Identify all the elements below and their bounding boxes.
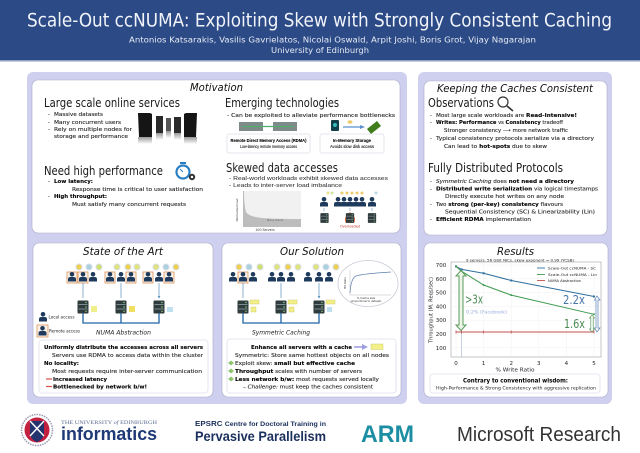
- text box: Increased latency: [53, 377, 108, 383]
- need high performance: -: [48, 179, 50, 185]
- text box: Symmetric: Store same hottest objects on all nodes: [235, 353, 389, 359]
- chart: magnified cache size curve: (proportional to dataset): [351, 299, 381, 303]
- text box: – Challenge: must keep the caches consistent: [243, 384, 373, 390]
- observations: [428, 96, 594, 150]
- arrow: 1.6x gain: [590, 315, 594, 332]
- large scale online services: -: [48, 112, 50, 118]
- diagram: symmetric caching: [229, 264, 339, 323]
- observations: -: [430, 136, 432, 142]
- large scale online services: -: [48, 127, 50, 133]
- logo: university of edinburgh informatics: informatics: [61, 423, 157, 444]
- emerging technologies: - Can be exploited to alleviate performance bottlenecks: [227, 113, 395, 119]
- large scale online services: Massive datasets: [54, 112, 103, 118]
- x axis ticks: 4: [565, 361, 569, 367]
- need high performance: Must satisfy many concurrent requests: [72, 202, 186, 208]
- fully distributed protocols: Efficient RDMA implementation: [436, 217, 531, 223]
- series: NUMA abstraction: [456, 330, 594, 334]
- need high performance: Response time is critical to user satisfaction: [72, 187, 203, 193]
- logo: ARM: ARM: [361, 421, 414, 448]
- chart: skew distribution: Normalized load: [235, 198, 239, 221]
- text box: No locality:: [44, 361, 79, 367]
- panel: our solution: [222, 243, 401, 397]
- text box: Bottlenecked by network b/w!: [53, 384, 147, 390]
- heading: Results: [497, 246, 535, 258]
- panel: motivation: [32, 80, 400, 233]
- in-memory storage box: In-Memory Storage: [333, 138, 372, 143]
- panel: state of the art: [33, 243, 213, 397]
- text box: Less network b/w: most requests served locally: [235, 377, 379, 383]
- conclusion box: [430, 374, 600, 393]
- icon: disk to memory: [331, 120, 381, 134]
- series: Scale-Out ccNUMA Lin: [455, 265, 595, 315]
- y axis ticks: [436, 263, 447, 352]
- x axis ticks: 3: [537, 361, 541, 367]
- text box: Enhance all servers with a cache: [251, 345, 353, 351]
- y axis ticks: 400: [436, 304, 447, 310]
- chart: skew distribution: [235, 191, 301, 232]
- chart: skew distribution: 100 Servers: [255, 228, 275, 232]
- fully distributed protocols: Sequential Consistency (SC) & Linearizability (Lin): [445, 210, 595, 216]
- emerging technologies: [225, 96, 395, 119]
- fully distributed protocols: Two strong (per-key) consistency flavours: [435, 202, 563, 208]
- y axis ticks: 200: [436, 332, 447, 338]
- in-memory storage box: [320, 134, 384, 153]
- logo: university of edinburgh informatics: THE UNIVERSITY of EDINBURGH: [61, 419, 157, 426]
- y axis ticks: 600: [436, 277, 447, 283]
- skewed data accesses: - Real-world workloads exhibit skewed data accesses: [229, 176, 388, 182]
- large scale online services: [44, 96, 180, 140]
- logo: EPSRC centre for doctoral training: [195, 419, 326, 444]
- label: 1.6x: 1.6x: [564, 317, 585, 331]
- x axis title: % Write Ratio: [496, 368, 535, 374]
- x axis ticks: 1: [482, 361, 485, 367]
- label: >3x: >3x: [465, 292, 483, 306]
- fully distributed protocols: Distributed write serialization via logical timestamps: [436, 186, 598, 192]
- motivation heading: Motivation: [190, 82, 243, 94]
- NUMA abstraction caption: NUMA Abstraction: [96, 330, 151, 336]
- large scale online services: Large scale online services: [44, 96, 180, 111]
- y axis ticks: 300: [436, 318, 447, 324]
- icon: server racks: [138, 113, 197, 144]
- text box: Most requests require inter-server communication: [52, 369, 202, 375]
- text box: Exploit skew: small but effective cache: [235, 361, 356, 367]
- logo: university of edinburgh informatics: [22, 414, 157, 446]
- authors: Antonios Katsarakis, Vasilis Gavrielatos, Nicolai Oswald, Arpit Joshi, Boris Grot, Vijay Nagarajan: [129, 34, 536, 44]
- y axis ticks: 100: [436, 346, 447, 352]
- label: 2.2x: 2.2x: [563, 293, 585, 307]
- observations: -: [430, 120, 432, 126]
- large scale online services: Many concurrent users: [54, 120, 121, 126]
- conclusion box: Contrary to conventional wisdom:: [463, 378, 568, 384]
- heading: Our Solution: [280, 246, 344, 258]
- text box: Uniformly distribute the accesses across all servers: [44, 345, 203, 351]
- diagram: load imbalance: [320, 192, 378, 228]
- logo: Microsoft Research: Microsoft Research: [457, 423, 621, 446]
- logo: EPSRC centre for doctoral training: EPSRC Centre for Doctoral Training in: [195, 419, 326, 428]
- y axis title: Throughput (M. Reqs/sec): [428, 277, 434, 344]
- legend: Scale-Out ccNUMA - SC: [548, 266, 596, 270]
- text box: [227, 339, 396, 393]
- x axis ticks: 5: [592, 361, 596, 367]
- need high performance: -: [48, 194, 50, 200]
- skewed data accesses: Skewed data accesses: [226, 161, 338, 176]
- fully distributed protocols: Directly execute hot writes on any node: [445, 194, 564, 200]
- label: 0.2% Facebook: 0.2% (Facebook): [466, 310, 507, 316]
- y axis ticks: 500: [436, 291, 447, 297]
- fully distributed protocols: -: [430, 186, 432, 192]
- observations: Stronger consistency ⟶ more network traffic: [444, 128, 568, 134]
- observations: Observations: [428, 96, 494, 111]
- fully distributed protocols: -: [430, 179, 432, 185]
- observations: -: [430, 113, 432, 119]
- large scale online services: storage and performance: [54, 134, 128, 140]
- need high performance: Need high performance: [44, 164, 163, 179]
- chart: magnified cache size curve: Hit Ratio: [343, 277, 347, 289]
- y axis ticks: 700: [436, 263, 447, 269]
- observations: Writes: Performance vs Consistency tradeoff: [436, 120, 563, 126]
- skewed data accesses: [226, 161, 388, 189]
- logo: EPSRC centre for doctoral training: Pervasive Parallelism: [195, 428, 326, 444]
- RDMA box: Remote Direct Memory Access (RDMA): [230, 138, 307, 143]
- panel: results: [424, 243, 608, 397]
- diagram: NUMA abstraction: [67, 264, 179, 323]
- emerging technologies: Emerging technologies: [225, 96, 339, 111]
- icon: stopwatch with gear: [176, 162, 195, 180]
- chart: magnified cache size curve: % Cache size: [357, 296, 376, 300]
- fully distributed protocols: Fully Distributed Protocols: [428, 161, 563, 176]
- icon: magnifying glass: [498, 97, 513, 111]
- series: Scale-Out ccNUMA SC: [455, 265, 595, 298]
- arrow: 3x gain: [456, 270, 466, 330]
- observations: Can lead to hot-spots due to skew: [444, 144, 548, 150]
- x axis ticks: 0: [454, 361, 458, 367]
- fully distributed protocols: [428, 161, 598, 223]
- line chart: throughput vs write ratio: [428, 262, 601, 374]
- need high performance: High throughput:: [54, 194, 107, 200]
- text box: [39, 340, 208, 393]
- legend: Local access: [48, 314, 74, 320]
- header banner: [0, 0, 640, 62]
- legend: Scale-Out ccNUMA - Lin: [548, 272, 598, 277]
- lavender background: left column: [27, 72, 407, 404]
- large scale online services: Rely on multiple nodes for: [54, 127, 133, 133]
- observations: Most large scale workloads are Read-Intensive!: [436, 113, 577, 119]
- affiliation: University of Edinburgh: [271, 45, 369, 55]
- symmetric caching caption: Symmetric Caching: [252, 330, 310, 336]
- icon: RDMA network cards: [239, 122, 297, 131]
- legend: [37, 312, 80, 337]
- text box: Throughput scales with number of servers: [235, 369, 362, 375]
- legend: [537, 266, 598, 283]
- skewed data accesses: - Leads to inter-server load imbalance: [229, 183, 342, 189]
- chart: skew distribution: Many items: [267, 218, 284, 222]
- panel: keeping the caches consistent: [424, 81, 607, 235]
- text box: Servers use RDMA to access data within the cluster: [52, 353, 204, 359]
- heading: State of the Art: [83, 246, 164, 258]
- fully distributed protocols: -: [430, 202, 432, 208]
- x axis ticks: 2: [509, 361, 513, 367]
- crest: [22, 414, 52, 446]
- need high performance: Low latency:: [54, 179, 93, 185]
- arrow: 2.2x gain: [594, 296, 600, 332]
- chart: magnified cache size curve: [338, 260, 398, 306]
- in-memory storage box: Avoids slow disk access: [330, 144, 374, 149]
- fully distributed protocols: -: [430, 217, 432, 223]
- need high performance: [44, 164, 203, 208]
- setup note: 9 servers, 56 Gbit NICs, skew exponent = 0.99 (YCSB): [466, 258, 575, 262]
- legend: NUMA Abstraction: [548, 278, 582, 283]
- large scale online services: -: [48, 120, 50, 126]
- RDMA box: [227, 134, 310, 153]
- diagram: load imbalance: Overloaded: [340, 224, 360, 228]
- lavender background: right column: [418, 72, 612, 404]
- fully distributed protocols: Symmetric Caching does not need a directory: [436, 179, 575, 185]
- observations: Typical consistency protocols serialize via a directory: [435, 136, 594, 142]
- x axis ticks: [454, 361, 596, 367]
- RDMA box: Low-latency remote memory access: [240, 144, 297, 149]
- conclusion box: High-Performance & Strong Consistency with aggressive replication: [436, 386, 596, 392]
- legend: Remote access: [49, 328, 80, 334]
- heading: Keeping the Caches Consistent: [437, 83, 594, 95]
